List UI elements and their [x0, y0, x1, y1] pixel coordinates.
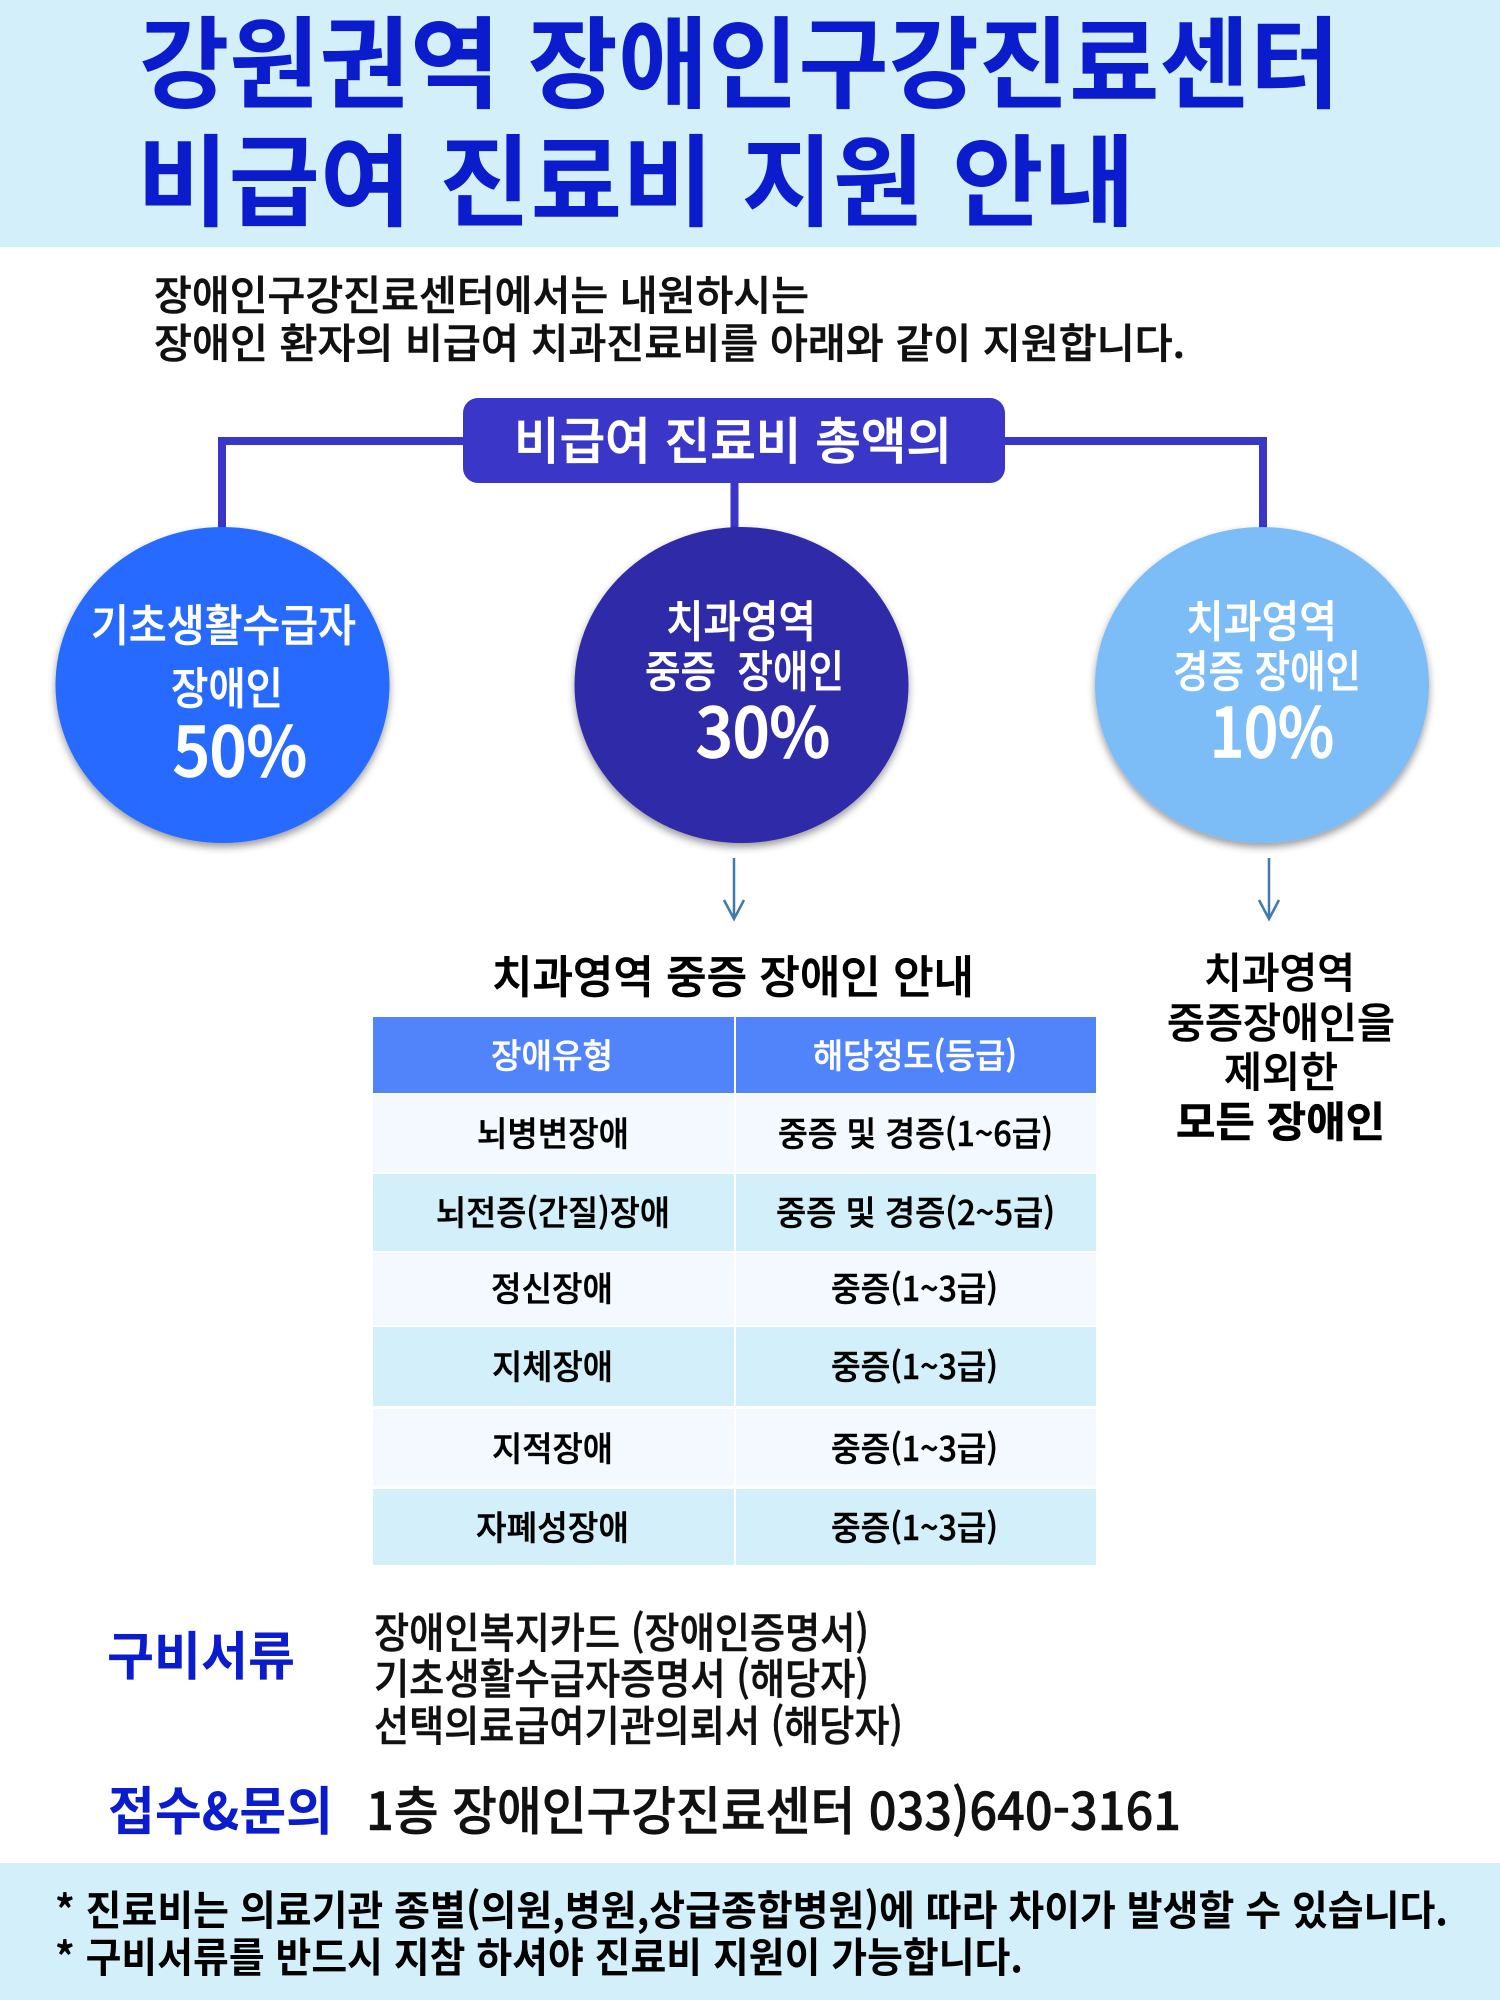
intro text: 장애인 환자의 비급여 치과진료비를 아래와 같이 지원합니다.: [154, 310, 1185, 370]
row: mental: 정신장애: [491, 1262, 613, 1311]
row: physical: 지체장애: [492, 1340, 613, 1389]
circle: 30%: 30%: [696, 678, 830, 777]
footer notes: [55, 1877, 1448, 1984]
arrow: to severe table: [724, 858, 744, 919]
row: physical: [373, 1327, 1096, 1406]
circle: 50%: 50%: [173, 697, 307, 796]
row: mental: 중증(1~3급): [831, 1262, 998, 1311]
connector lines: [222, 441, 1263, 530]
title: 비급여 진료비 지원 안내: [137, 102, 1135, 247]
row: brain lesion: 뇌병변장애: [477, 1107, 629, 1156]
circle: 10%: 10%: [1210, 678, 1334, 777]
circle: 10%: 경증 장애인: [1173, 636, 1361, 700]
row: brain lesion: 중증 및 경증(1~6급): [778, 1107, 1053, 1156]
mild disability note: 중증장애인을: [1167, 990, 1395, 1051]
table header row: [373, 1017, 1096, 1093]
circle: 50%: 기초생활수급자: [91, 590, 356, 654]
circle: 10%: 치과영역: [1186, 586, 1337, 650]
circle: 30%: 중증 장애인: [645, 636, 844, 700]
circle: 50%: 장애인: [171, 653, 283, 717]
table header row: 해당정도(등급): [813, 1029, 1017, 1078]
heading box: total cost: [463, 398, 1005, 483]
title: [137, 0, 1340, 247]
mild disability note: 모든 장애인: [1176, 1089, 1385, 1150]
table: [373, 1017, 1096, 1565]
table heading: 치과영역 중증 장애인 안내: [492, 941, 974, 1006]
mild disability note: [1167, 940, 1395, 1150]
row: epilepsy: [373, 1174, 1096, 1251]
row: intellectual: [373, 1409, 1096, 1486]
mild disability note: 치과영역: [1204, 940, 1355, 1001]
arrow: to mild note: [1259, 858, 1279, 919]
footer notes: * 진료비는 의료기관 종별(의원,병원,상급종합병원)에 따라 차이가 발생할 수 있습니다.: [55, 1877, 1448, 1937]
mild disability note: 제외한: [1224, 1039, 1338, 1100]
circle: 30%: [574, 527, 908, 843]
row: physical: 중증(1~3급): [831, 1340, 998, 1389]
footer band: [0, 1863, 1500, 2000]
table header row: 장애유형: [491, 1029, 613, 1078]
required documents label: 구비서류: [107, 1615, 295, 1690]
required documents list: 선택의료급여기관의뢰서 (해당자): [374, 1693, 903, 1754]
intro text: [154, 262, 1185, 370]
row: mental: [373, 1253, 1096, 1325]
circle: 10%: [1095, 527, 1429, 843]
row: intellectual: 중증(1~3급): [831, 1422, 998, 1471]
row: intellectual: 지적장애: [492, 1422, 613, 1471]
required documents list: [374, 1600, 903, 1754]
row: autism: [373, 1489, 1096, 1565]
contact label: 접수&문의: [108, 1770, 333, 1845]
circle: 30%: 치과영역: [666, 586, 816, 650]
circle: 50%: [56, 527, 390, 843]
row: epilepsy: 뇌전증(간질)장애: [436, 1186, 670, 1235]
required documents list: 장애인복지카드 (장애인증명서): [374, 1600, 869, 1661]
heading box: total cost: 비급여 진료비 총액의: [514, 402, 952, 474]
required documents list: 기초생활수급자증명서 (해당자): [374, 1646, 869, 1707]
row: autism: 자폐성장애: [476, 1501, 629, 1550]
footer notes: * 구비서류를 반드시 지참 하셔야 진료비 지원이 가능합니다.: [55, 1924, 1023, 1984]
intro text: 장애인구강진료센터에서는 내원하시는: [154, 262, 809, 322]
row: autism: 중증(1~3급): [831, 1501, 998, 1550]
row: brain lesion: [373, 1095, 1096, 1172]
header band: [0, 0, 1500, 247]
row: epilepsy: 중증 및 경증(2~5급): [776, 1186, 1055, 1235]
contact detail: 1층 장애인구강진료센터 033)640-3161: [366, 1770, 1181, 1845]
